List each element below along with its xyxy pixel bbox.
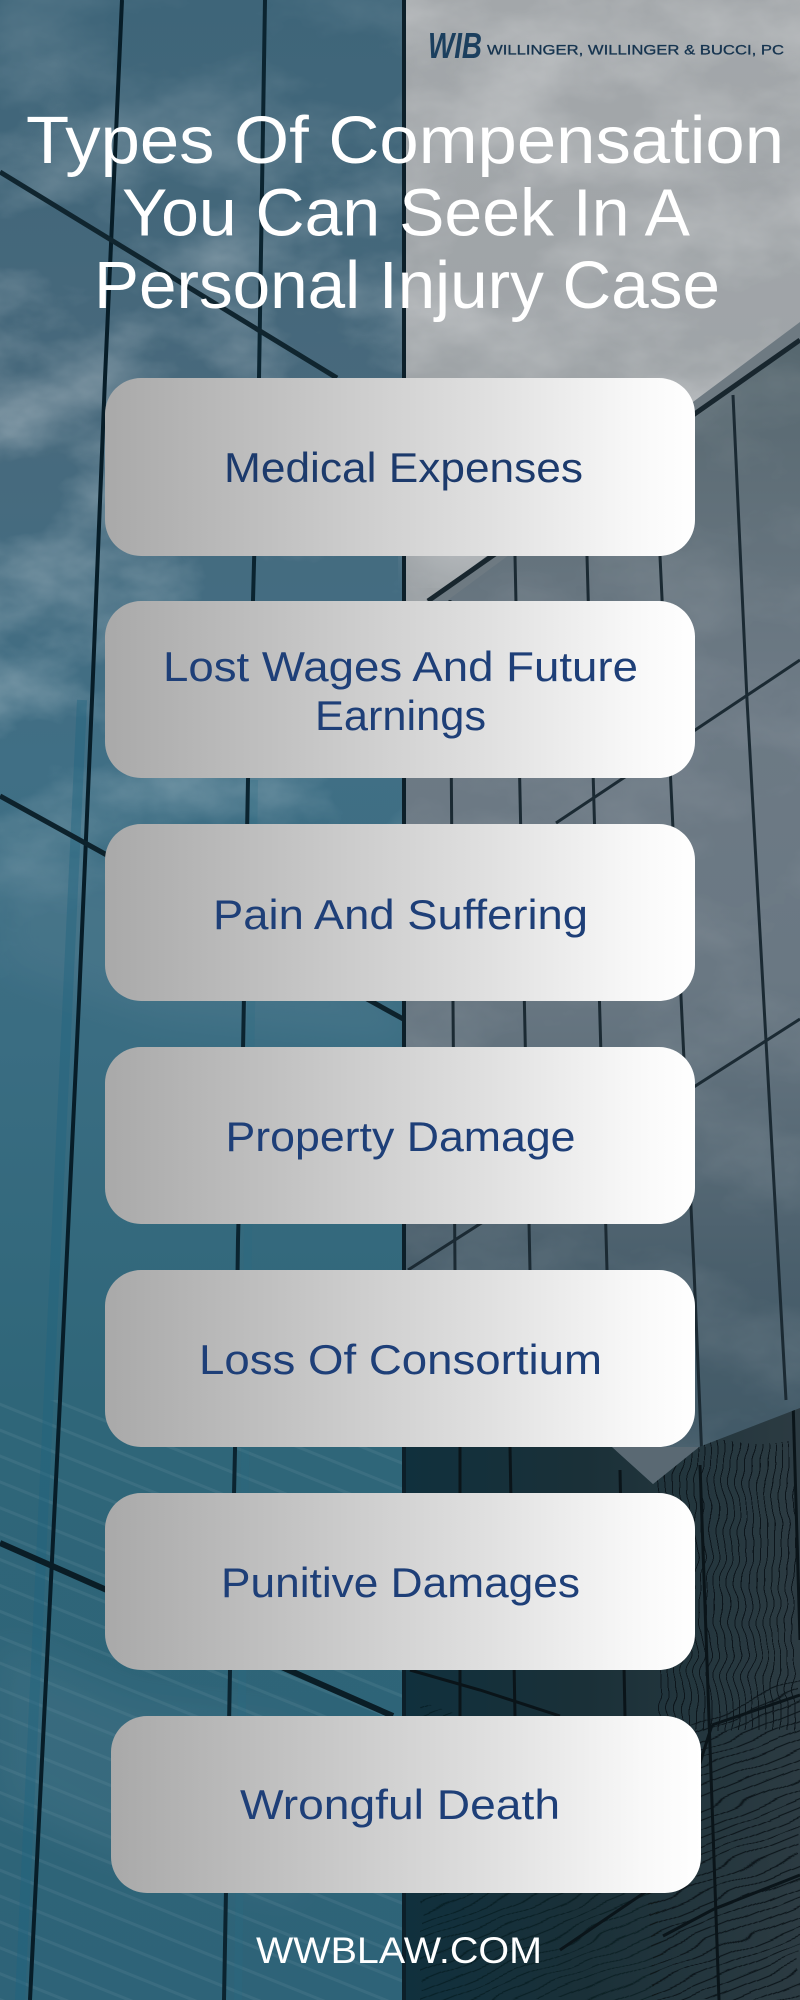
title [26,103,784,323]
left teal glass panel [0,0,405,2000]
card: Punitive Damages: Punitive Damages [221,1559,580,1606]
card: Wrongful Death [111,1716,701,1893]
card: Loss Of Consortium: Loss Of Consortium [199,1336,602,1383]
right tower facade [405,340,800,1500]
card: Lost Wages And Future Earnings [105,601,695,778]
title: Personal Injury Case [94,248,720,323]
tower roof edge [428,322,800,601]
card: Loss Of Consortium [105,1270,695,1447]
logo monogram: WIB [428,25,482,66]
lower dark facade [405,1400,800,2000]
card: Lost Wages And Future Earnings: Lost Wages And Future [163,643,638,690]
card: Lost Wages And Future Earnings: Earnings [315,692,486,739]
curved glass band [612,1447,699,1484]
right sky panel [405,0,800,800]
title: You Can Seek In A [122,176,690,250]
card: Wrongful Death: Wrongful Death [240,1781,560,1828]
logo wordmark: WILLINGER, WILLINGER & BUCCI, PC [487,42,784,58]
card: Pain And Suffering [105,824,695,1001]
card: Pain And Suffering: Pain And Suffering [213,891,588,938]
title: Types Of Compensation [26,103,784,178]
card: Property Damage: Property Damage [226,1113,576,1160]
card: Medical Expenses [105,378,695,556]
card: Property Damage [105,1047,695,1224]
card: Punitive Damages [105,1493,695,1670]
seam between panels [402,0,406,2000]
card: Medical Expenses: Medical Expenses [224,444,583,491]
footer website: WWBLAW.COM [256,1930,542,1971]
logo: Willinger, Willinger & Bucci, PC [428,25,784,66]
